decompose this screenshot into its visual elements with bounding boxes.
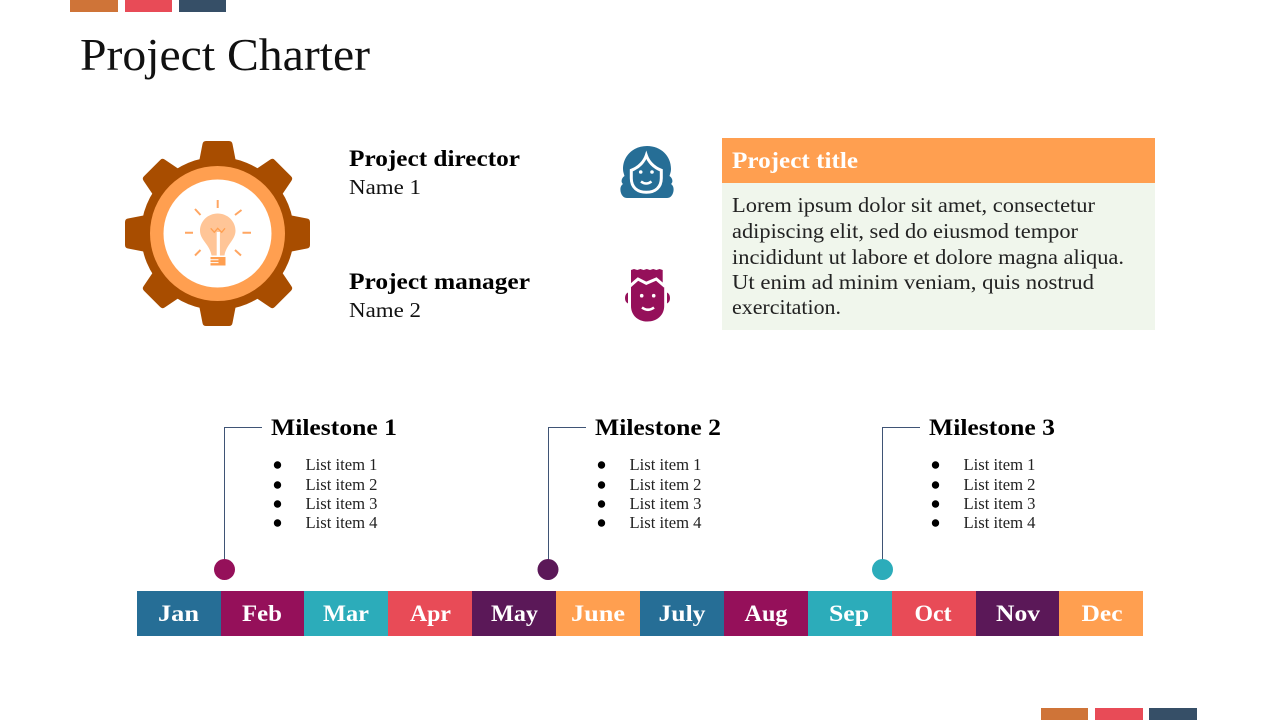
text block: project director: Project director — [349, 146, 520, 171]
text block: project manager: Project manager — [349, 269, 530, 294]
month timeline bar: Apr — [410, 601, 451, 626]
month timeline bar — [137, 591, 1143, 636]
milestone 3: Milestone 3 — [929, 415, 1055, 440]
month timeline bar: Dec — [1082, 601, 1122, 626]
panel heading: Project title — [732, 148, 858, 173]
month timeline bar: Feb — [242, 601, 282, 626]
milestone 1 — [214, 415, 397, 580]
panel body text: incididunt ut labore et dolore magna aliqua. — [732, 245, 1124, 269]
milestone 3: List item 2 — [964, 475, 1036, 494]
milestone 2: List item 2 — [630, 475, 702, 494]
milestone 1: List item 4 — [306, 513, 378, 532]
milestone 3: List item 4 — [964, 513, 1036, 532]
milestone 3 — [872, 415, 1055, 580]
panel body text: adipiscing elit, sed do eiusmod tempor — [732, 219, 1078, 243]
top colour tabs — [70, 0, 226, 12]
milestone 1: List item 1 — [306, 455, 378, 474]
milestone 2: List item 4 — [630, 513, 702, 532]
month timeline bar: July — [658, 601, 706, 626]
icon: light bulb — [185, 200, 251, 266]
month timeline bar: Mar — [323, 601, 369, 626]
milestone 2: Milestone 2 — [595, 415, 721, 440]
month timeline bar: May — [491, 601, 539, 626]
milestone 3: List item 3 — [964, 494, 1036, 513]
milestone 2: List item 1 — [630, 455, 702, 474]
milestone 1: List item 3 — [306, 494, 378, 513]
panel heading — [722, 138, 1155, 183]
month timeline bar: Jan — [158, 601, 199, 626]
text block: project manager: Name 2 — [349, 298, 421, 322]
milestone 1: List item 2 — [306, 475, 378, 494]
milestone 2 — [538, 415, 721, 580]
icon: gear with light bulb — [125, 141, 310, 326]
month timeline bar: Aug — [744, 601, 788, 626]
milestone 3: List item 1 — [964, 455, 1036, 474]
panel: project title — [722, 138, 1155, 330]
panel body text — [732, 193, 1124, 319]
milestone 1: Milestone 1 — [271, 415, 397, 440]
panel body text: exercitation. — [732, 295, 841, 319]
panel body text: Ut enim ad minim veniam, quis nostrud — [732, 270, 1095, 294]
bottom colour tabs — [1041, 708, 1197, 720]
icon: man face — [625, 269, 670, 322]
text block: project director — [349, 146, 520, 199]
month timeline bar: Oct — [914, 601, 952, 626]
month timeline bar: Nov — [996, 601, 1041, 626]
month timeline bar: Sep — [829, 601, 869, 626]
month timeline bar: June — [571, 601, 625, 626]
text block: project director: Name 1 — [349, 175, 421, 199]
panel body text: Lorem ipsum dolor sit amet, consectetur — [732, 193, 1095, 217]
title: Project Charter — [80, 29, 370, 80]
text block: project manager — [349, 269, 530, 322]
milestone 2: List item 3 — [630, 494, 702, 513]
icon: woman face — [620, 146, 674, 198]
